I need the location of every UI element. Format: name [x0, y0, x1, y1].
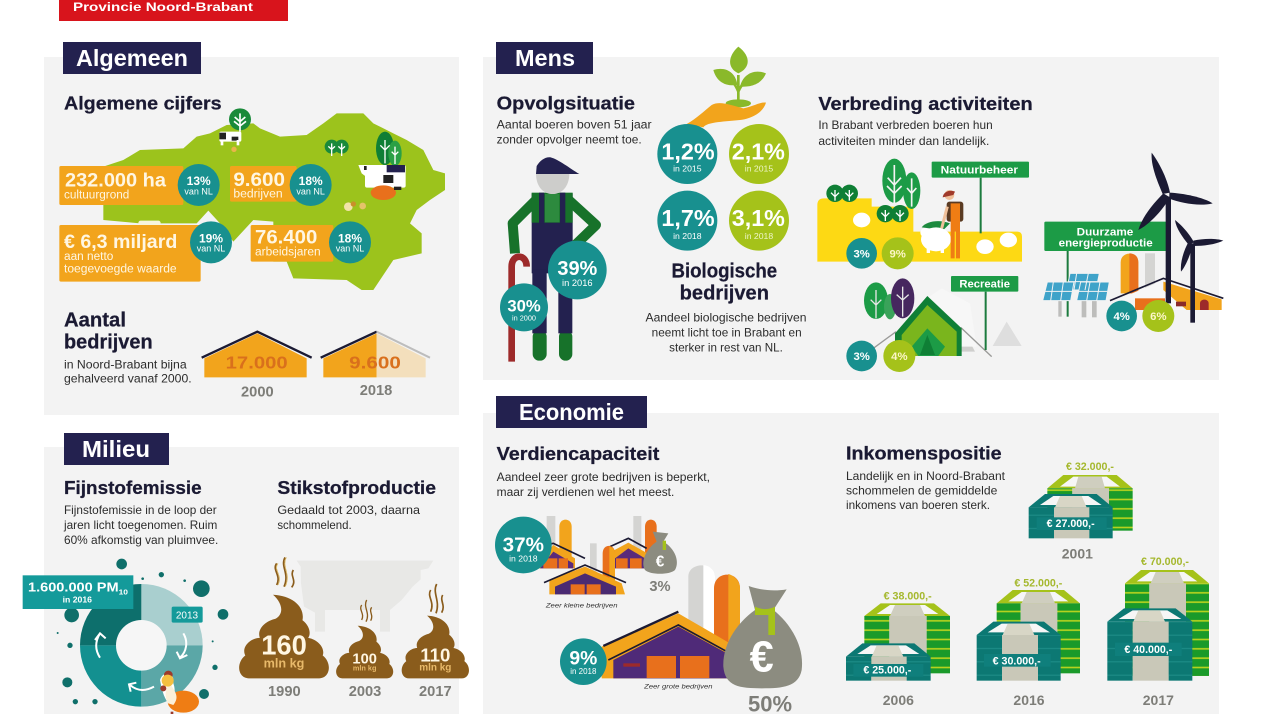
- stat: 232.000 ha cultuurgrond: 232.000 ha: [65, 171, 166, 192]
- chart: 110 mln kg in 2017: 2017: [419, 684, 452, 700]
- chart: income stacks 2017: [1107, 556, 1209, 708]
- heading: Inkomenspositie: Inkomenspositie: [846, 442, 1002, 463]
- stat: € 6,3 miljard: toegevoegde waarde: [64, 262, 177, 276]
- chart: 100 mln kg in 2003: [336, 600, 393, 700]
- chart: income stacks 2001: € 27.000,-: [1047, 518, 1095, 530]
- stat: 1,2% in 2015: [657, 124, 717, 184]
- text: Stikstofproductie description: schommelend.: [277, 519, 352, 532]
- stat: 2,1% in 2015: [729, 124, 789, 184]
- stat: € 6,3 miljard: [59, 221, 232, 282]
- stat: 76.400 arbeidsjaren: 76.400: [255, 227, 317, 248]
- house: 17.000 in 2000: 2000: [241, 385, 274, 401]
- stat: 3% Recreatie NL: 3%: [853, 351, 870, 363]
- heading: Algemeen: [63, 42, 201, 74]
- stat: 9.600 bedrijven: van NL: [296, 186, 325, 196]
- stat: 9.600 bedrijven: [230, 164, 332, 206]
- stat: 37% in 2018: 37%: [503, 534, 544, 557]
- stat: 3% Natuurbeheer NL: 3%: [853, 248, 870, 260]
- chart: income stacks 2017: € 40.000,-: [1124, 644, 1173, 656]
- text: Stikstofproductie description: Gedaald tot 2003, daarna: [277, 504, 421, 517]
- text: Verdiencapaciteit description: maar zij verdienen wel het meest.: [497, 486, 674, 499]
- heading: Biologische bedrijven: bedrijven: [680, 282, 769, 304]
- scene: Natuurbeheer: Natuurbeheer: [941, 164, 1018, 176]
- stat: 30% in 2000: 30%: [507, 297, 541, 316]
- stat: 2,1% in 2015: in 2015: [745, 164, 773, 174]
- text: Opvolgsituatie description: Aantal boeren boven 51 jaar: [497, 118, 652, 131]
- chart: 160 mln kg in 1990: mln kg: [264, 657, 304, 671]
- icon: trees and cows on map: [219, 108, 406, 211]
- stat: 76.400 arbeidsjaren: [251, 221, 371, 263]
- label: 3%: 3%: [649, 579, 671, 595]
- house: 9.600 in 2018: 9.600: [349, 352, 401, 372]
- text: Opvolgsituatie description: [497, 118, 652, 146]
- stat: 37% in 2018: [495, 517, 552, 573]
- icon: chicken: [160, 671, 199, 714]
- heading: Aantal bedrijven: bedrijven: [64, 330, 153, 353]
- text: Fijnstofemissie description: jaren licht toegenomen. Ruim: [63, 519, 217, 532]
- chart: 110 mln kg in 2017: 110: [420, 644, 450, 665]
- stat: 9% in 2018: [560, 638, 607, 685]
- scene: Duurzame energieproductie: Duurzame: [1077, 226, 1133, 238]
- stat: 3,1% in 2018: in 2018: [745, 231, 773, 241]
- heading: Milieu: [64, 433, 169, 465]
- stat: 9% in 2018: in 2018: [570, 667, 597, 676]
- chart: income stacks 2001: 2001: [1062, 545, 1093, 561]
- chart: fine dust donut: [23, 559, 228, 707]
- text: Biologische bedrijven description: neemt licht toe in Brabant en: [652, 327, 802, 340]
- map of Noord-Brabant: [103, 113, 445, 290]
- chart: 160 mln kg in 1990: [239, 557, 329, 700]
- panel: Algemeen: [44, 42, 459, 415]
- stat: 6% energie Brabant: [1142, 300, 1174, 332]
- caption: Zeer grote bedrijven: Zeer grote bedrijven: [643, 683, 713, 690]
- stat: 1,7% in 2018: [657, 191, 717, 251]
- label: 1.600.000 PM10: 1.600.000 PM: [28, 581, 107, 595]
- caption: Zeer kleine bedrijven: Zeer kleine bedrijven: [545, 602, 618, 609]
- icon: small money bag: [643, 532, 677, 574]
- text: Inkomenspositie description: schommelen de gemiddelde: [846, 484, 997, 497]
- stat: 37% in 2018: in 2018: [509, 554, 538, 564]
- stat: 9% Natuurbeheer Brabant: 9%: [889, 248, 906, 260]
- stat: 39% in 2016: 39%: [557, 258, 598, 280]
- chart: 160 mln kg in 1990: 160: [261, 629, 307, 660]
- icon: cow silhouette: [297, 561, 433, 632]
- stat: 232.000 ha cultuurgrond: 13%: [187, 174, 211, 188]
- stat: 9.600 bedrijven: 9.600: [233, 170, 285, 191]
- label: 2013: 2013: [176, 610, 199, 621]
- heading: Verbreding activiteiten: Verbreding activiteiten: [818, 93, 1033, 114]
- stat: 2,1% in 2015: 2,1%: [732, 138, 785, 164]
- stat: 3% Recreatie NL: [846, 341, 877, 371]
- chart: income stacks 2006: 2006: [883, 692, 914, 708]
- stat: 4% Recreatie Brabant: [883, 340, 915, 372]
- icon: large money bag: [723, 586, 802, 688]
- chart: income stacks 2017: € 70.000,-: [1141, 556, 1189, 568]
- panel: Mens: [483, 42, 1223, 380]
- chart: income stacks 2016: [977, 578, 1080, 708]
- house: 17.000 in 2000: 17.000: [226, 352, 288, 372]
- icon: farmer with cane: [512, 157, 596, 362]
- chart: 100 mln kg in 2003: mln kg: [353, 664, 376, 673]
- heading: Milieu: Milieu: [82, 436, 150, 462]
- heading: Fijnstofemissie: Fijnstofemissie: [64, 477, 202, 498]
- chart: income stacks 2006: [846, 590, 950, 708]
- stat: 9.600 bedrijven: bedrijven: [233, 186, 283, 200]
- stat: 4% Recreatie Brabant: 4%: [891, 351, 908, 363]
- stat: € 6,3 miljard: aan netto: [64, 249, 114, 263]
- stat: 1,7% in 2018: 1,7%: [661, 205, 715, 231]
- stat: 76.400 arbeidsjaren: arbeidsjaren: [255, 245, 321, 259]
- stat: 4% energie NL: 4%: [1113, 311, 1130, 323]
- text: Opvolgsituatie description: zonder opvolger neemt toe.: [497, 133, 642, 146]
- label: 1.600.000 PM10: 10: [119, 587, 128, 596]
- house: 17.000 in 2000: [202, 332, 312, 401]
- chart: 160 mln kg in 1990: 1990: [268, 684, 301, 700]
- panel: Economie: [483, 396, 1219, 714]
- heading: Biologische bedrijven: Biologische: [671, 260, 777, 282]
- heading: Mens: Mens: [515, 45, 575, 71]
- heading: Mens: [496, 42, 593, 74]
- stat: 232.000 ha cultuurgrond: van NL: [184, 186, 213, 196]
- stat: € 6,3 miljard: € 6,3 miljard: [64, 232, 177, 253]
- chart: income stacks 2006: € 25.000,-: [863, 665, 912, 677]
- icon: plant on hand: [687, 47, 766, 127]
- stat: € 6,3 miljard: van NL: [197, 244, 225, 254]
- label: 2013: [172, 607, 203, 623]
- text: Fijnstofemissie description: Fijnstofemissie in de loop der: [64, 504, 217, 517]
- stat: 30% in 2000: [500, 283, 548, 331]
- stat: € 6,3 miljard: 19%: [199, 231, 223, 245]
- chart: income stacks 2017: 2017: [1143, 692, 1174, 708]
- scene: Duurzame energieproductie: [1043, 153, 1223, 332]
- stat: 9% in 2018: 9%: [569, 648, 597, 669]
- heading: Economie: Economie: [519, 399, 624, 425]
- text: Biologische bedrijven description: Aandeel biologische bedrijven: [645, 312, 806, 325]
- stat: 3,1% in 2018: 3,1%: [732, 205, 785, 231]
- text: Verbreding description: [818, 119, 993, 148]
- header: Provincie Noord-Brabant: [59, 0, 288, 21]
- text: Fijnstofemissie description: [63, 504, 218, 547]
- text: Verbreding description: In Brabant verbreden boeren hun: [818, 119, 993, 132]
- stat: 232.000 ha cultuurgrond: cultuurgrond: [64, 187, 129, 201]
- text: Inkomenspositie description: [846, 470, 1006, 512]
- icon: wind turbines: [1138, 153, 1223, 323]
- heading: Stikstofproductie: Stikstofproductie: [277, 477, 436, 498]
- stat: 39% in 2016: [548, 241, 607, 299]
- house: 9.600 in 2018: [321, 332, 430, 399]
- stat: 3,1% in 2018: [729, 191, 789, 251]
- text: Inkomenspositie description: inkomens van boeren sterk.: [846, 499, 990, 512]
- label: 1.600.000 PM10: [23, 575, 133, 609]
- stat: 76.400 arbeidsjaren: 18%: [338, 231, 362, 245]
- label: 1.600.000 PM10: in 2016: [63, 594, 92, 604]
- chart: income stacks 2016: 2016: [1013, 692, 1045, 708]
- text: Stikstofproductie description: [277, 504, 421, 532]
- chart: income stacks 2001: [1029, 461, 1133, 561]
- illustration: zeer grote bedrijven barn: [602, 565, 740, 678]
- stat: 6% energie Brabant: 6%: [1150, 311, 1167, 323]
- stat: 1,7% in 2018: in 2018: [673, 231, 702, 241]
- chart: income stacks 2006: € 38.000,-: [884, 590, 932, 602]
- scene: Duurzame energieproductie: energieproductie: [1059, 238, 1153, 250]
- chart: income stacks 2016: € 52.000,-: [1014, 578, 1063, 590]
- text: Verbreding description: activiteiten minder dan landelijk.: [818, 135, 989, 148]
- heading: Opvolgsituatie: Opvolgsituatie: [497, 92, 635, 113]
- stat: 9% Natuurbeheer Brabant: [882, 237, 914, 269]
- text: Biologische bedrijven description: sterker in rest van NL.: [669, 342, 783, 355]
- header: Provincie Noord-Brabant: Provincie Noord-Brabant: [73, 0, 253, 14]
- stat: 232.000 ha cultuurgrond: [59, 164, 220, 206]
- chart: income stacks 2001: € 32.000,-: [1066, 461, 1114, 473]
- stat: 3% Natuurbeheer NL: [846, 238, 877, 269]
- text: Biologische bedrijven description: [645, 312, 806, 355]
- chart: 110 mln kg in 2017: [402, 584, 469, 700]
- chart: income stacks 2016: € 30.000,-: [993, 655, 1041, 667]
- text: Verdiencapaciteit description: [497, 471, 710, 499]
- stat: 9.600 bedrijven: 18%: [299, 174, 323, 188]
- house: 9.600 in 2018: 2018: [360, 383, 392, 399]
- text: Aantal bedrijven description: [64, 358, 192, 386]
- chart: 100 mln kg in 2003: 100: [352, 651, 377, 667]
- text: Aantal bedrijven description: gehalveerd vanaf 2000.: [64, 373, 192, 386]
- chart: 110 mln kg in 2017: mln kg: [419, 663, 451, 674]
- heading: Algemene cijfers: Algemene cijfers: [64, 92, 222, 113]
- scene: Natuurbeheer: [817, 159, 1029, 269]
- text: Verdiencapaciteit description: Aandeel zeer grote bedrijven is beperkt,: [497, 471, 710, 484]
- heading: Verdiencapaciteit: Verdiencapaciteit: [497, 443, 659, 464]
- icon: large money bag: €: [750, 634, 774, 682]
- stat: 39% in 2016: in 2016: [562, 278, 593, 288]
- heading: Aantal bedrijven: [64, 309, 153, 353]
- illustration: zeer kleine bedrijven: [533, 516, 657, 594]
- scene: Recreatie: [846, 276, 1022, 372]
- text: Fijnstofemissie description: 60% afkomstig van pluimvee.: [64, 534, 218, 547]
- chart: 100 mln kg in 2003: 2003: [349, 684, 381, 700]
- stat: 76.400 arbeidsjaren: van NL: [336, 244, 364, 254]
- panel: Milieu: [23, 433, 469, 714]
- stat: 4% energie NL: [1106, 301, 1137, 331]
- text: Inkomenspositie description: Landelijk en in Noord-Brabant: [846, 470, 1006, 483]
- heading: Algemeen: Algemeen: [76, 45, 188, 71]
- icon: small money bag: €: [656, 554, 665, 571]
- stat: 1,2% in 2015: in 2015: [673, 164, 702, 174]
- heading: Aantal bedrijven: Aantal: [64, 309, 126, 332]
- scene: Recreatie: Recreatie: [959, 278, 1010, 290]
- stat: 1,2% in 2015: 1,2%: [661, 138, 715, 164]
- text: Aantal bedrijven description: in Noord-Brabant bijna: [64, 358, 187, 371]
- stat: 30% in 2000: in 2000: [512, 314, 536, 323]
- heading: Biologische bedrijven: [671, 260, 777, 304]
- heading: Economie: [496, 396, 647, 428]
